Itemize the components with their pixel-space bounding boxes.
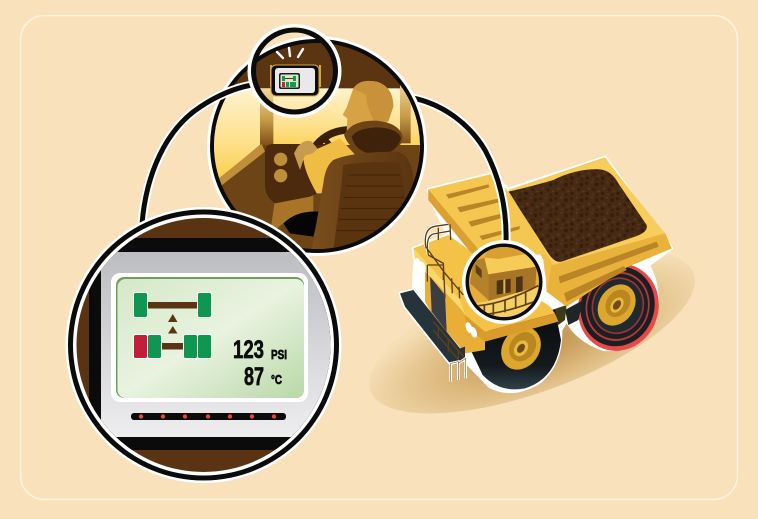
pressure reading: 123 [233,336,264,364]
connector: cabin to truck [413,98,506,243]
dash panel [265,144,333,203]
temperature reading [244,366,282,386]
driver head [343,81,393,132]
alert rays [277,48,303,58]
lower dash [220,145,420,249]
gauges [274,153,287,166]
walkway [476,286,538,317]
grille [430,277,447,332]
seat back [312,152,413,250]
cab deck and nose [413,235,558,353]
magnifier: large monitor [66,207,349,483]
seat headrest [344,120,403,145]
dump body [508,157,672,307]
axle shadow [552,300,583,325]
windows [213,88,423,152]
cab side [470,258,488,300]
temperature reading: 87 [244,363,264,391]
direction arrows [168,314,178,334]
pressure reading [234,340,287,360]
indicator light bar [131,413,286,420]
rear wheel [566,252,671,362]
driver hand [294,141,317,170]
small tablet [270,65,321,96]
cab door [516,276,523,294]
cab window [497,279,511,295]
driver body [303,138,360,193]
pillars [260,88,273,145]
front axle [134,292,212,318]
cab roof [484,247,525,259]
dump truck [400,157,672,391]
monitor housing [89,238,349,450]
small lens ring [250,26,340,116]
magnifier: dashboard monitor small [250,26,340,116]
canopy [428,174,547,262]
connector: monitor to cabin [142,85,252,224]
cabin interior [214,43,420,249]
cab wall [488,267,537,301]
truck white outline [400,157,672,391]
temperature reading: °C [271,372,282,387]
steering wheel [313,126,347,145]
load of dirt [508,169,647,262]
bumper [400,290,465,363]
monitor bezel [101,252,341,437]
pressure reading: PSI [271,347,287,362]
front ladder [451,358,466,382]
rear axle [134,334,212,358]
ladders and handrails [425,224,465,362]
front wheel [467,310,561,389]
magnifier: driver in cabin [207,36,427,257]
magnifier: cab on truck [462,240,546,324]
ground shadow [350,217,714,447]
screen [111,273,308,402]
